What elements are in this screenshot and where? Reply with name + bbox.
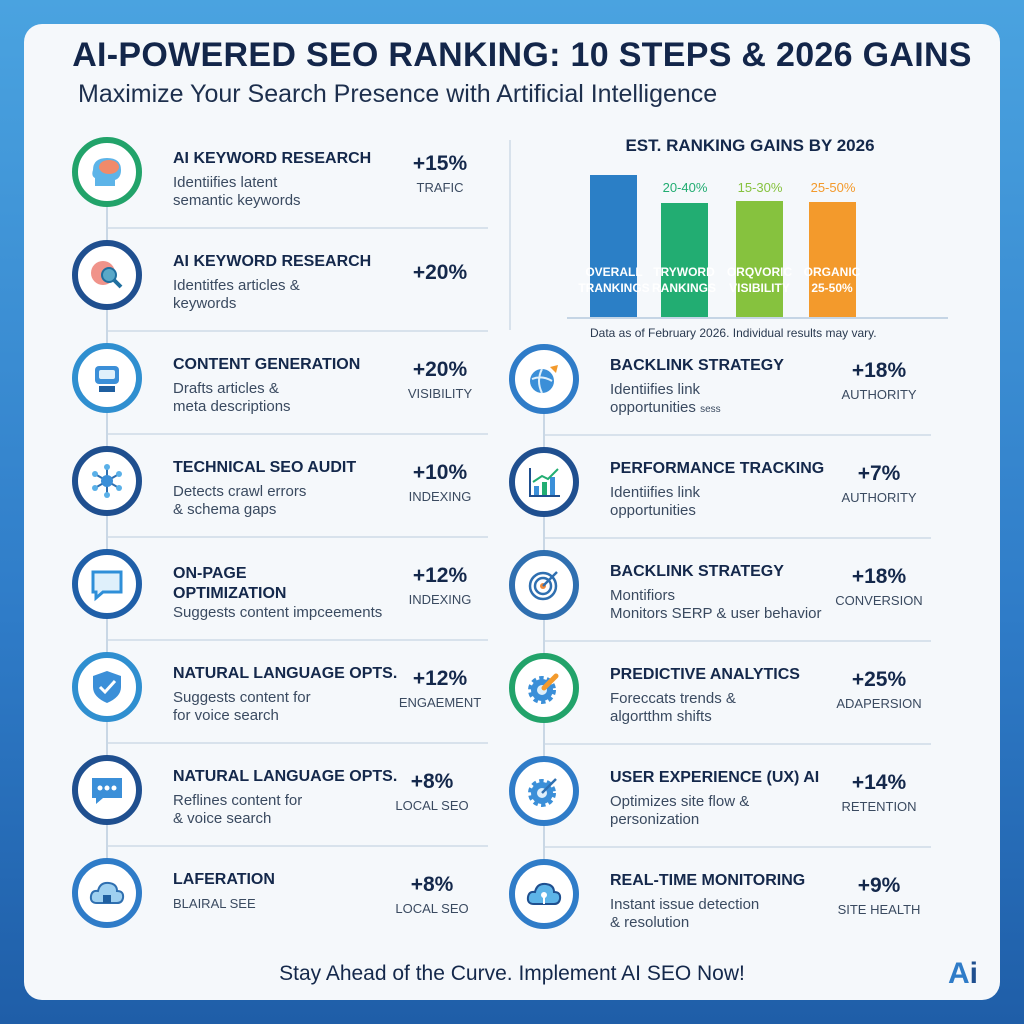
step: backlink strategy 1: opportunities sess (610, 399, 721, 416)
icon: gear (509, 756, 579, 826)
step: AI keyword research 2 (72, 240, 467, 312)
step: real-time monitoring: Instant issue detection (610, 896, 759, 913)
chart: est ranking gains (567, 136, 948, 340)
icon: cloud (509, 859, 579, 929)
step: backlink strategy 2 (509, 550, 923, 622)
step: natural language opts 1: Suggests content for (173, 689, 311, 706)
step: backlink strategy 1 (509, 344, 917, 416)
step: laferation: LAFERATION (173, 871, 275, 888)
step: backlink strategy 2: Montifiors (610, 587, 675, 604)
step: real-time monitoring: +9% (858, 874, 900, 897)
step: user experience AI: +14% (852, 771, 906, 794)
icon: globe (509, 344, 579, 414)
icon: target (509, 550, 579, 620)
step: laferation: BLAIRAL SEE (173, 896, 256, 911)
step: content generation: CONTENT GENERATION (173, 356, 360, 373)
step: natural language opts 1 (72, 652, 481, 724)
step: backlink strategy 2: Monitors SERP & user behavior (610, 605, 822, 622)
step: performance tracking: PERFORMANCE TRACKING (610, 460, 824, 477)
step: predictive analytics (509, 653, 922, 725)
step: backlink strategy 2: +18% (852, 565, 906, 588)
step: AI keyword research 2: Identitfes articles & (173, 277, 300, 294)
step: predictive analytics: +25% (852, 668, 906, 691)
chart panel divider (509, 140, 511, 330)
step: backlink strategy 1: +18% (852, 359, 906, 382)
step: predictive analytics: ADAPERSION (836, 696, 922, 711)
chart: est ranking gains: VISIBILITY (729, 281, 790, 295)
icon: robot (72, 343, 142, 413)
step: natural language opts 1: for voice search (173, 707, 279, 724)
step: user experience AI (509, 756, 917, 828)
step: content generation (72, 343, 472, 415)
step: backlink strategy 1: Identiifies link (610, 381, 700, 398)
step: laferation: LOCAL SEO (395, 901, 469, 916)
step: user experience AI: RETENTION (841, 799, 917, 814)
step: content generation: VISIBILITY (408, 386, 472, 401)
step: performance tracking: Identiifies link (610, 484, 700, 501)
footer call to action: Stay Ahead of the Curve. Implement AI SEO Now! (279, 962, 745, 985)
step: technical SEO audit (72, 446, 471, 518)
icon: cloud lock (72, 858, 142, 928)
step: performance tracking (509, 447, 917, 519)
chart: est ranking gains: OVERALL (585, 265, 643, 279)
timeline line right (543, 400, 545, 890)
step: technical SEO audit: Detects crawl errors (173, 483, 306, 500)
step: real-time monitoring: SITE HEALTH (838, 902, 920, 917)
step: natural language opts 1: ENGAEMENT (399, 695, 481, 710)
step: backlink strategy 2: CONVERSION (835, 593, 923, 608)
step: on-page optimization (72, 549, 471, 621)
chart note: Data as of February 2026. Individual results may vary. (590, 326, 877, 340)
step: AI keyword research 2: +20% (413, 261, 467, 284)
step: backlink strategy 1: AUTHORITY (841, 387, 917, 402)
icon: shield (72, 652, 142, 722)
chart: est ranking gains: 25-50% (811, 281, 853, 295)
step: laferation (72, 858, 469, 928)
icon: brain magnifier (72, 240, 142, 310)
step: AI keyword research 1: Identiifies latent (173, 174, 277, 191)
step: on-page optimization: Suggests content impceements (173, 604, 382, 621)
step: backlink strategy 1: BACKLINK STRATEGY (610, 357, 784, 374)
step: performance tracking: +7% (858, 462, 900, 485)
bar: overall rankings (590, 175, 637, 317)
chart: est ranking gains: TRANKINGS (578, 281, 650, 295)
icon: gear rocket (509, 653, 579, 723)
step: technical SEO audit: & schema gaps (173, 501, 276, 518)
step: performance tracking: opportunities (610, 502, 696, 519)
step: backlink strategy 2: BACKLINK STRATEGY (610, 563, 784, 580)
chart: est ranking gains: ORGANIC (804, 265, 860, 279)
step: predictive analytics: Foreccats trends & (610, 690, 736, 707)
step: natural language opts 2: & voice search (173, 810, 271, 827)
step: user experience AI: personization (610, 811, 699, 828)
step: AI keyword research 1: TRAFIC (417, 180, 463, 195)
step: user experience AI: Optimizes site flow & (610, 793, 749, 810)
step: real-time monitoring (509, 859, 920, 931)
step: content generation: +20% (413, 358, 467, 381)
icon: speech dots (72, 755, 142, 825)
step: user experience AI: USER EXPERIENCE (UX) AI (610, 769, 819, 786)
bar: organic (809, 202, 856, 317)
step: AI keyword research 1 (72, 137, 467, 209)
chart: est ranking gains: 20-40% (663, 180, 707, 195)
step: natural language opts 2: Reflines content for (173, 792, 302, 809)
chart: est ranking gains: RANKINGS (652, 281, 716, 295)
step: on-page optimization: ON-PAGE (173, 565, 246, 582)
step: AI keyword research 1: AI KEYWORD RESEARCH (173, 150, 371, 167)
step: AI keyword research 2: keywords (173, 295, 236, 312)
logo: Ai: Ai (948, 957, 978, 990)
step: technical SEO audit: TECHNICAL SEO AUDIT (173, 459, 356, 476)
chart: est ranking gains: ORQVORIC (727, 265, 792, 279)
icon: network (72, 446, 142, 516)
step: content generation: Drafts articles & (173, 380, 279, 397)
step: natural language opts 2 (72, 755, 469, 827)
step: on-page optimization: OPTIMIZATION (173, 585, 286, 602)
step: technical SEO audit: INDEXING (409, 489, 471, 504)
icon: brain head (72, 137, 142, 207)
step: natural language opts 2: NATURAL LANGUAGE OPTS. (173, 768, 397, 785)
step: real-time monitoring: & resolution (610, 914, 689, 931)
step: natural language opts 1: +12% (413, 667, 467, 690)
step: AI keyword research 1: +15% (413, 152, 467, 175)
step: AI keyword research 2: AI KEYWORD RESEARCH (173, 253, 371, 270)
subtitle: Maximize Your Search Presence with Artificial Intelligence (78, 80, 717, 108)
step: laferation: +8% (411, 873, 453, 896)
step: on-page optimization: INDEXING (409, 592, 471, 607)
bar: organic visibility (736, 201, 783, 317)
step: natural language opts 2: LOCAL SEO (395, 798, 469, 813)
bar: keyword rankings (661, 203, 708, 317)
step: natural language opts 1: NATURAL LANGUAGE OPTS. (173, 665, 397, 682)
icon: chat bubble (72, 549, 142, 619)
step: performance tracking: AUTHORITY (841, 490, 917, 505)
step: technical SEO audit: +10% (413, 461, 467, 484)
timeline line left (106, 200, 108, 890)
title: AI-POWERED SEO RANKING: 10 STEPS & 2026 GAINS (72, 36, 972, 74)
step: natural language opts 2: +8% (411, 770, 453, 793)
step: on-page optimization: +12% (413, 564, 467, 587)
step: content generation: meta descriptions (173, 398, 291, 415)
chart: est ranking gains: TRYWORD (653, 265, 715, 279)
step: predictive analytics: PREDICTIVE ANALYTICS (610, 666, 800, 683)
step: predictive analytics: algortthm shifts (610, 708, 712, 725)
chart: est ranking gains: 25-50% (811, 180, 855, 195)
icon: chart (509, 447, 579, 517)
step: real-time monitoring: REAL-TIME MONITORING (610, 872, 805, 889)
step: AI keyword research 1: semantic keywords (173, 192, 301, 209)
chart: est ranking gains: 15-30% (738, 180, 782, 195)
chart title: EST. RANKING GAINS BY 2026 (625, 136, 875, 155)
